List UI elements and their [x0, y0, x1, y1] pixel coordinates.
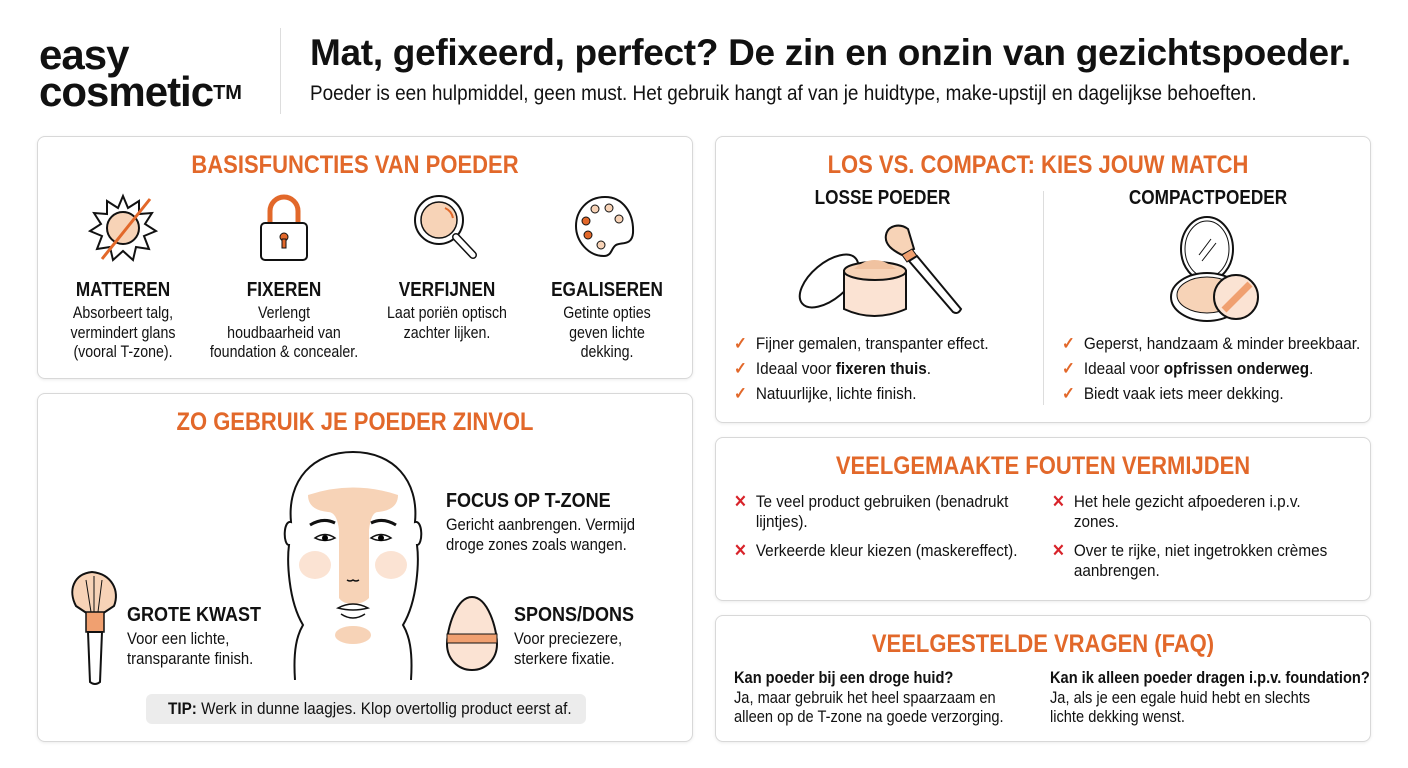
panel: gebruik	[37, 393, 693, 742]
panel: los vs compact	[715, 136, 1371, 423]
mistakes left: lijntjes).	[756, 512, 808, 530]
face illustration	[284, 451, 422, 680]
icon: palette	[575, 196, 634, 257]
label: spons/dons: Voor preciezere,	[514, 630, 622, 648]
column: losse poeder: LOSSE POEDER	[815, 187, 950, 209]
mistakes right: zones.	[1074, 512, 1119, 530]
panel: faq	[715, 615, 1371, 742]
feature: matteren	[70, 279, 175, 361]
feature: fixeren: FIXEREN	[247, 279, 321, 301]
mistakes right	[1052, 492, 1327, 580]
faq 1: alleen op de T-zone na goede verzorging.	[734, 707, 1004, 726]
feature: matteren: (vooral T-zone).	[73, 343, 173, 361]
feature: fixeren: houdbaarheid van	[227, 324, 341, 342]
column: compactpoeder: COMPACTPOEDER	[1129, 187, 1287, 209]
icon: compact mirror	[1170, 216, 1259, 322]
mistakes right: ✕	[1052, 541, 1065, 560]
feature: egaliseren	[551, 279, 663, 361]
subtitle: Poeder is een hulpmiddel, geen must. Het gebruik hangt af van je huidtype, make-upstijl en dagelijkse behoeften.	[310, 82, 1257, 105]
mistakes left: Te veel product gebruiken (benadrukt	[756, 492, 1008, 511]
panel: basisfuncties	[37, 136, 693, 379]
label: focus t-zone: FOCUS OP T-ZONE	[446, 490, 611, 512]
column: compactpoeder: ✓ Ideaal voor opfrissen onderweg.	[1062, 359, 1313, 378]
feature: matteren: vermindert glans	[71, 324, 175, 342]
heading: ZO GEBRUIK JE POEDER ZINVOL	[177, 408, 533, 436]
tip box: TIP: Werk in dunne laagjes. Klop overtollig product eerst af.	[168, 699, 572, 718]
logo: easy	[39, 31, 128, 78]
label: grote kwast: Voor een lichte,	[127, 630, 229, 648]
label: spons/dons: sterkere fixatie.	[514, 650, 615, 668]
mistakes left: Verkeerde kleur kiezen (maskereffect).	[756, 541, 1017, 560]
mistakes right: ✕	[1052, 492, 1065, 511]
heading: VEELGESTELDE VRAGEN (FAQ)	[872, 630, 1214, 658]
column: compactpoeder: ✓ Geperst, handzaam & minder breekbaar.	[1062, 334, 1360, 353]
title: Mat, gefixeerd, perfect? De zin en onzin van gezichtspoeder.	[310, 32, 1351, 73]
column: losse poeder	[734, 187, 989, 403]
label: focus t-zone: Gericht aanbrengen. Vermijd	[446, 516, 635, 534]
feature: matteren: Absorbeert talg,	[73, 304, 173, 322]
column: compactpoeder	[1062, 187, 1360, 403]
faq 2: lichte dekking wenst.	[1050, 707, 1185, 726]
mistakes right: aanbrengen.	[1074, 560, 1160, 580]
heading: LOS VS. COMPACT: KIES JOUW MATCH	[828, 151, 1248, 179]
feature: egaliseren: EGALISEREN	[551, 279, 663, 301]
faq 1: Kan poeder bij een droge huid?	[734, 668, 953, 687]
feature: verfijnen: VERFIJNEN	[399, 279, 495, 301]
column: losse poeder: ✓ Fijner gemalen, transpanter effect.	[734, 334, 989, 353]
column: losse poeder: ✓ Ideaal voor fixeren thuis.	[734, 359, 931, 378]
feature: matteren: MATTEREN	[76, 279, 170, 301]
label: spons/dons: SPONS/DONS	[514, 604, 634, 626]
label: spons/dons	[514, 604, 634, 668]
feature: verfijnen: zachter lijken.	[404, 324, 490, 342]
column: compactpoeder: ✓ Biedt vaak iets meer dekking.	[1062, 384, 1284, 403]
panel: fouten	[715, 437, 1371, 601]
feature: egaliseren: Getinte opties	[563, 304, 651, 322]
heading: BASISFUNCTIES VAN POEDER	[191, 151, 519, 179]
column: losse poeder: ✓ Natuurlijke, lichte finish.	[734, 384, 917, 403]
faq 2: Ja, als je een egale huid hebt en slechts	[1050, 688, 1310, 706]
feature: fixeren	[210, 279, 358, 361]
feature: egaliseren: dekking.	[581, 343, 633, 361]
mistakes left: ✕	[734, 541, 747, 560]
faq 2: Kan ik alleen poeder dragen i.p.v. foundation?	[1050, 668, 1370, 687]
icon: magnifier	[414, 195, 477, 259]
label: grote kwast: transparante finish.	[127, 650, 253, 668]
feature: fixeren: foundation & concealer.	[210, 343, 358, 361]
label: grote kwast: GROTE KWAST	[127, 604, 261, 626]
icon: sponge	[446, 596, 498, 671]
label: focus t-zone: droge zones zoals wangen.	[446, 536, 627, 554]
mistakes left	[734, 492, 1017, 560]
feature: egaliseren: geven lichte	[569, 324, 645, 342]
icon: loose powder jar	[798, 224, 962, 317]
label: grote kwast	[127, 604, 261, 668]
mistakes right: Over te rijke, niet ingetrokken crèmes	[1074, 541, 1327, 560]
icon: brush	[71, 571, 117, 685]
icon: lock	[260, 194, 308, 261]
faq 1: Ja, maar gebruik het heel spaarzaam en	[734, 688, 996, 706]
faq 2	[1050, 668, 1370, 726]
logo	[39, 31, 242, 115]
faq 1	[734, 668, 1004, 726]
mistakes left: ✕	[734, 492, 747, 511]
icon: sun crossed	[88, 194, 158, 262]
logo: cosmeticTM	[39, 68, 242, 115]
mistakes right: Het hele gezicht afpoederen i.p.v.	[1074, 492, 1301, 511]
feature: verfijnen: Laat poriën optisch	[387, 304, 507, 322]
heading: VEELGEMAAKTE FOUTEN VERMIJDEN	[836, 452, 1250, 480]
label: focus t-zone	[446, 490, 635, 554]
feature: verfijnen	[387, 279, 507, 342]
feature: fixeren: Verlengt	[258, 304, 310, 322]
tip box	[146, 694, 586, 724]
